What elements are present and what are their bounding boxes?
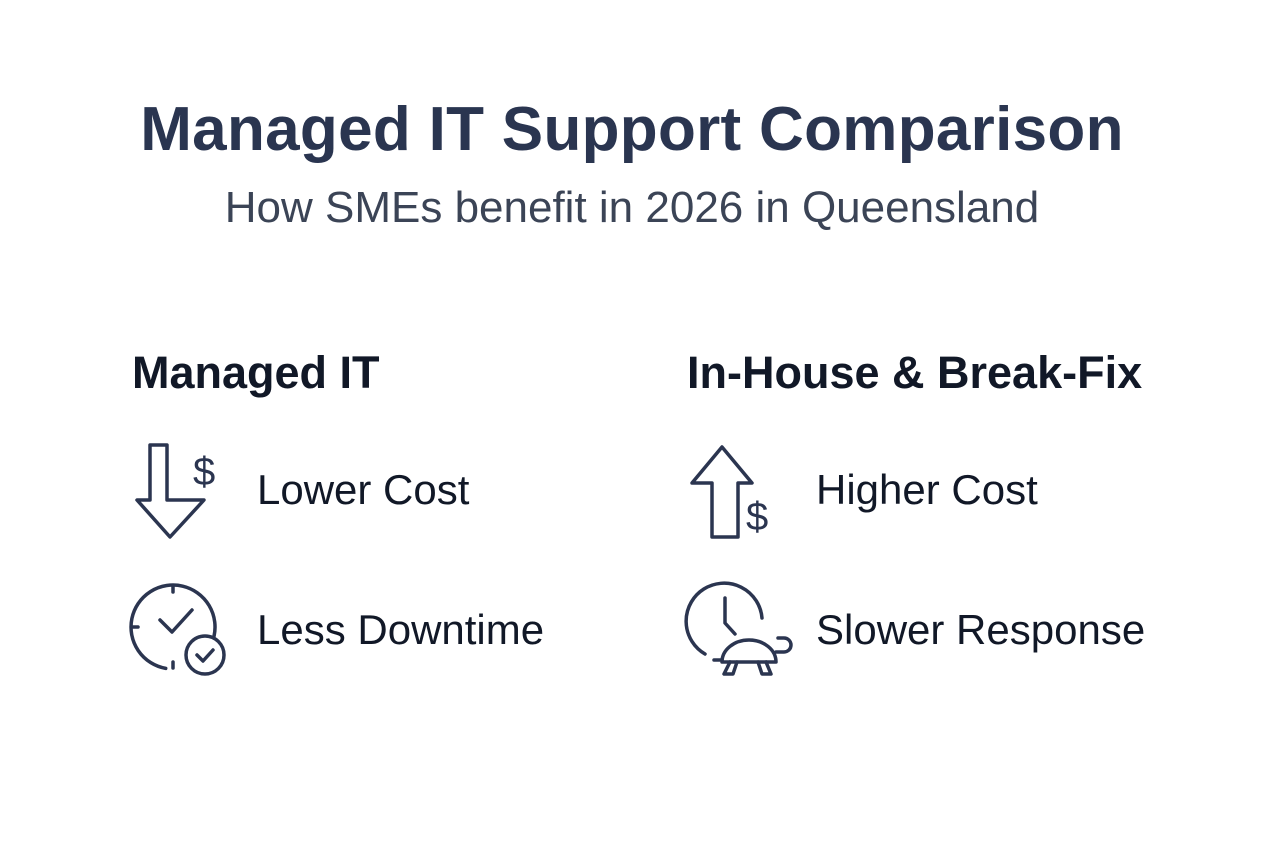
heading: In-House & Break-Fix: In-House & Break-Fix xyxy=(687,347,1142,398)
icon: up arrow with dollar: $ xyxy=(746,495,768,539)
text: Higher Cost: Higher Cost xyxy=(816,466,1038,513)
subtitle: How SMEs benefit in 2026 in Queensland xyxy=(225,183,1039,232)
icon: clock with turtle xyxy=(686,583,791,674)
text: Slower Response: Slower Response xyxy=(816,606,1145,653)
title: Managed IT Support Comparison xyxy=(140,95,1124,164)
text: Lower Cost: Lower Cost xyxy=(257,466,469,513)
icon: clock with check xyxy=(131,585,224,674)
text: Less Downtime: Less Downtime xyxy=(257,606,544,653)
heading: Managed IT: Managed IT xyxy=(132,347,380,398)
icon: up arrow with dollar xyxy=(692,447,768,539)
icon: down arrow with dollar xyxy=(137,445,215,537)
icon: down arrow with dollar: $ xyxy=(193,450,215,494)
